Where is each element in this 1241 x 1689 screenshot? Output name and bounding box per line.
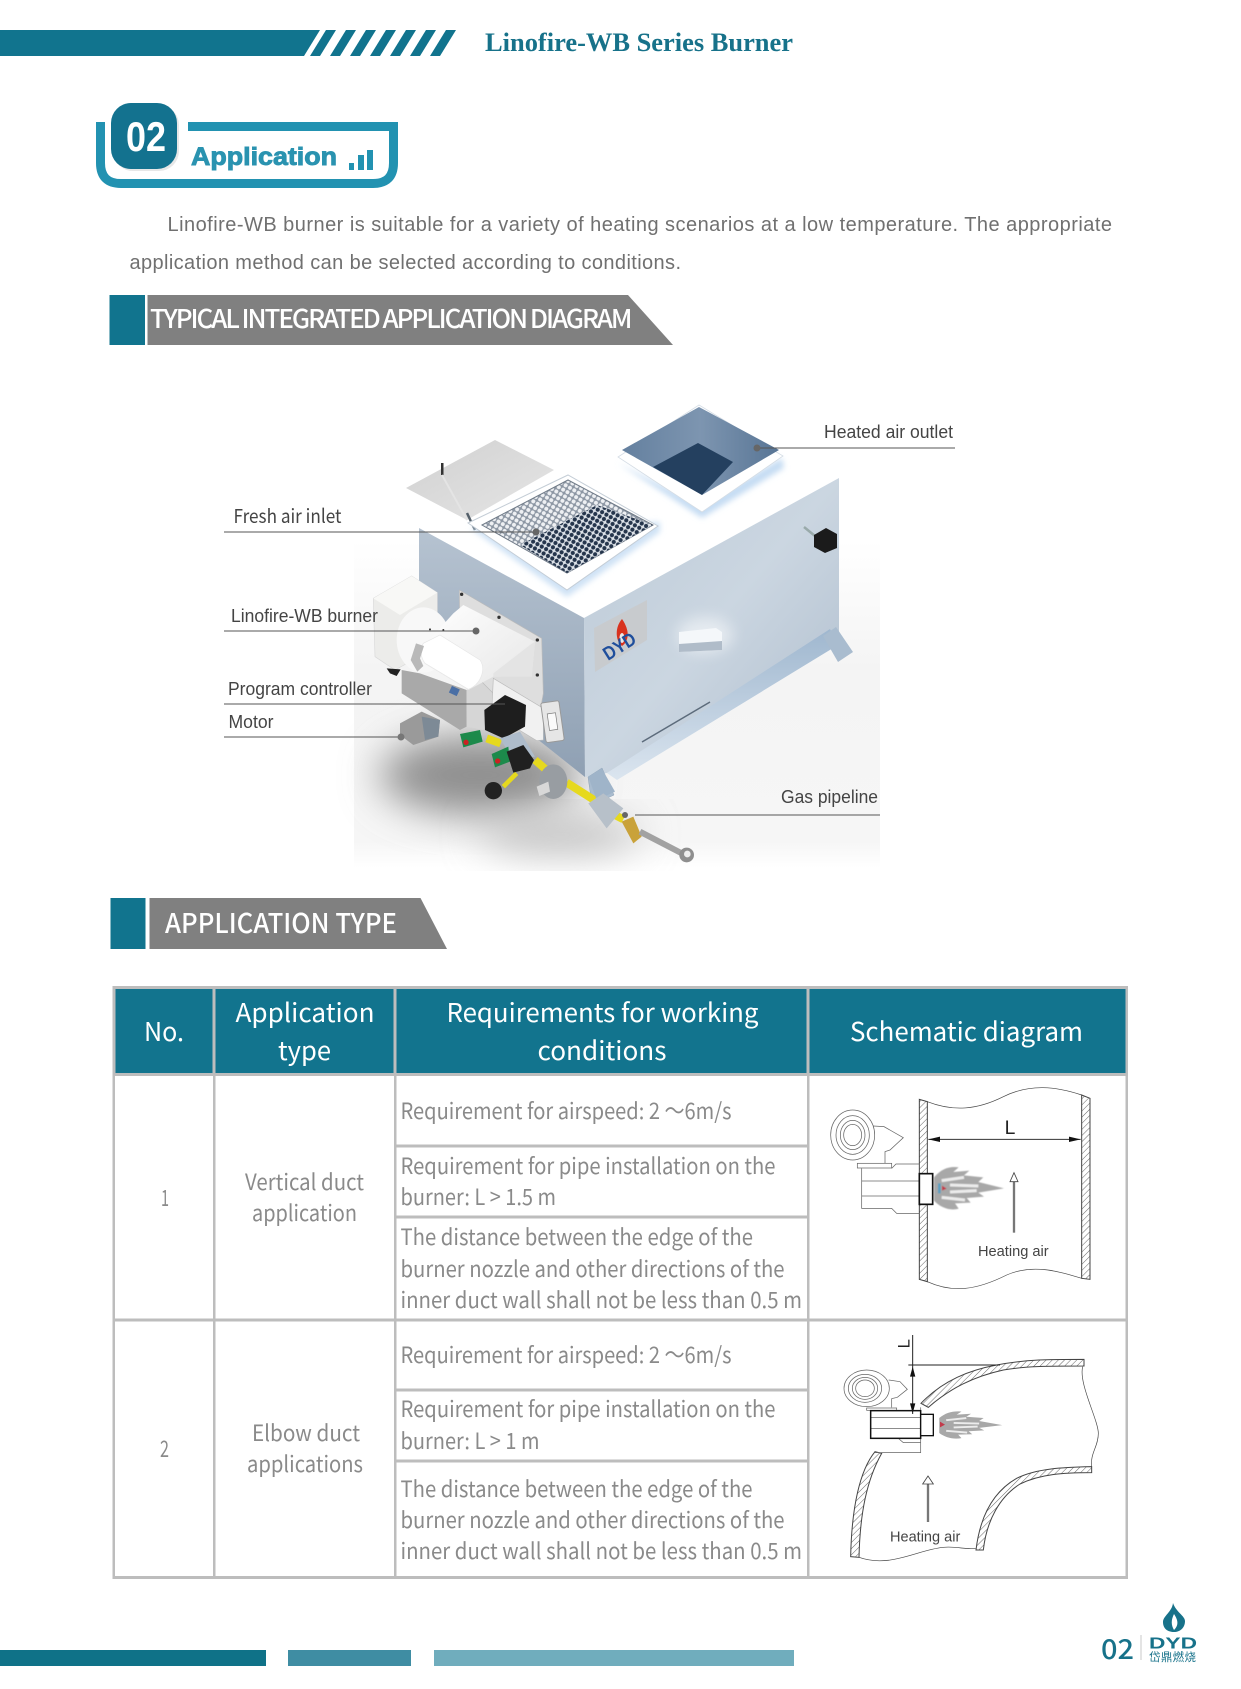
schematic 1: vertical duct xyxy=(831,1088,1090,1289)
table header row: No. xyxy=(144,1012,184,1049)
callout: heated air outlet: Heated air outlet xyxy=(824,422,953,442)
valve body xyxy=(500,732,535,760)
clamp xyxy=(411,643,424,672)
row 1 cells: Requirement for airspeed: 2 ～6m/s xyxy=(400,1094,732,1126)
schematic 2: elbow duct xyxy=(844,1335,1098,1561)
heading: typical integrated application diagram xyxy=(110,295,673,345)
lower housing xyxy=(402,670,467,730)
bracket xyxy=(492,678,543,741)
pressure regulator xyxy=(537,764,567,799)
intro paragraph: Linofire-WB burner is suitable for a variety of heating scenarios at a low temperature. The appropriate xyxy=(168,214,1112,236)
table header row: Schematic diagram xyxy=(850,1012,1083,1049)
callout: gas pipeline xyxy=(622,787,880,818)
fresh air inlet frame and mesh xyxy=(468,475,660,597)
row 1 cells: Vertical duct xyxy=(245,1165,364,1197)
section badge: 02 Application xyxy=(100,103,394,184)
green solenoid valve 2 xyxy=(492,747,510,767)
side panel under body xyxy=(467,677,493,730)
callout: gas pipeline: Gas pipeline xyxy=(781,787,878,807)
callout: linofire-wb burner: Linofire-WB burner xyxy=(231,606,378,626)
table header row: Application xyxy=(236,993,374,1030)
heating air arrow xyxy=(923,1476,933,1522)
table header row: type xyxy=(278,1031,331,1068)
section badge: 02 Application: 02 xyxy=(126,113,166,160)
heating air arrow xyxy=(1010,1173,1018,1233)
nozzle xyxy=(921,1414,933,1436)
section badge: 02 Application: Application xyxy=(191,143,337,171)
callout: motor: Motor xyxy=(228,712,274,732)
green solenoid valve 1 xyxy=(460,730,483,747)
row 2 cells xyxy=(160,1338,802,1566)
row 2 cells: burner nozzle and other directions of the xyxy=(400,1503,784,1535)
burner outline xyxy=(844,1370,921,1453)
pipe clamp block xyxy=(588,793,623,828)
nameplate with DYD logo: DYD xyxy=(600,629,640,665)
row 2 cells: Elbow duct xyxy=(252,1416,360,1448)
flame core xyxy=(940,1422,945,1427)
box left face xyxy=(419,528,585,777)
row 1 cells: inner duct wall shall not be less than 0.5 m xyxy=(400,1283,802,1315)
row 2 cells: 2 xyxy=(160,1432,169,1464)
duct walls and outline xyxy=(919,1088,1090,1289)
dimension L: L xyxy=(894,1339,913,1348)
heated air outlet duct xyxy=(618,405,784,518)
page number: 02 xyxy=(1101,1628,1134,1667)
burner assembly xyxy=(373,576,694,862)
callout: linofire-wb burner xyxy=(224,606,480,634)
heading: typical integrated application diagram: TYPICAL INTEGRATED APPLICATION DIAGRAM xyxy=(150,299,632,336)
row 1 cells: 1 xyxy=(161,1181,169,1213)
heating air label: Heating air xyxy=(890,1528,960,1545)
black foot xyxy=(387,668,401,676)
flame xyxy=(939,1411,1002,1439)
row 2 cells: Requirement for airspeed: 2 ～6m/s xyxy=(400,1338,732,1370)
table grid lines xyxy=(112,1076,1128,1579)
intro paragraph: application method can be selected according to conditions. xyxy=(130,252,681,274)
dimension arrow L xyxy=(928,1118,1081,1142)
pressure gauge xyxy=(485,782,502,799)
heading: application type xyxy=(110,898,447,949)
footer DYD logo: DYD xyxy=(1149,1636,1197,1652)
rail slit line xyxy=(642,702,710,742)
callout: program controller: Program controller xyxy=(228,679,372,699)
row 2 cells: Requirement for pipe installation on the xyxy=(400,1392,776,1424)
control box xyxy=(373,576,437,670)
base rail xyxy=(607,629,838,780)
brass fitting xyxy=(622,817,642,843)
table header row xyxy=(112,986,1128,1076)
dimension arrow L: L xyxy=(1005,1118,1016,1139)
heating air label: Heating air xyxy=(978,1243,1049,1260)
main white body xyxy=(423,605,535,690)
gas train pipes xyxy=(487,738,623,819)
burner body xyxy=(871,1411,921,1438)
header title: Linofire-WB Series Burner xyxy=(485,28,793,57)
callout: fresh air inlet xyxy=(224,502,540,536)
front foot bracket xyxy=(588,768,615,800)
dimension L xyxy=(894,1335,1000,1414)
row 1 cells: Requirement for pipe installation on the xyxy=(400,1149,776,1181)
intro paragraph xyxy=(130,214,1112,274)
row 1 cells xyxy=(161,1094,802,1315)
duct walls and outline xyxy=(851,1359,1098,1561)
sight glass xyxy=(541,701,564,743)
row 1 cells: The distance between the edge of the xyxy=(400,1220,753,1252)
black valve actuator xyxy=(507,745,534,773)
flame xyxy=(934,1167,1004,1210)
rear foot xyxy=(823,627,853,662)
table header row: conditions xyxy=(538,1031,666,1068)
callout: motor xyxy=(224,712,404,740)
plate screws xyxy=(429,593,539,677)
callout: fresh air inlet: Fresh air inlet xyxy=(234,502,342,529)
row 2 cells: burner: L > 1 m xyxy=(400,1424,540,1456)
program controller xyxy=(484,695,526,738)
footer DYD logo xyxy=(1140,1603,1197,1665)
floor shadow backdrop xyxy=(354,540,880,868)
motor xyxy=(400,712,440,745)
row 1 cells: application xyxy=(252,1196,357,1228)
outlet pipe xyxy=(640,832,694,862)
mounting plate xyxy=(459,590,543,730)
nozzle xyxy=(919,1174,933,1204)
callout: heated air outlet xyxy=(754,422,955,452)
row 2 cells: applications xyxy=(247,1447,363,1479)
burner outline xyxy=(831,1110,919,1213)
nameplate with DYD logo xyxy=(594,600,647,672)
product illustration: integrated burner box xyxy=(354,388,880,868)
footer DYD logo: 岱鼎燃烧 xyxy=(1149,1649,1196,1665)
box right face xyxy=(584,478,839,777)
open lid xyxy=(406,440,554,530)
box top face xyxy=(419,388,839,618)
row 2 cells: inner duct wall shall not be less than 0.5 m xyxy=(400,1534,802,1566)
blue tag xyxy=(449,686,460,696)
side pipe stub xyxy=(677,617,733,653)
footer bars xyxy=(0,1650,794,1666)
white cylinder xyxy=(421,635,483,689)
front foot xyxy=(588,768,614,805)
control box top xyxy=(373,576,437,615)
application type table xyxy=(112,986,1128,1579)
row 1 cells: burner nozzle and other directions of the xyxy=(400,1252,784,1284)
row 1 cells: burner: L > 1.5 m xyxy=(400,1180,556,1212)
fan housing xyxy=(397,607,450,673)
black junction box xyxy=(804,527,837,553)
header banner with diagonal stripes xyxy=(0,30,456,56)
row 2 cells: The distance between the edge of the xyxy=(400,1472,752,1504)
table header row: Requirements for working xyxy=(446,993,759,1030)
heading: application type: APPLICATION TYPE xyxy=(165,902,397,941)
